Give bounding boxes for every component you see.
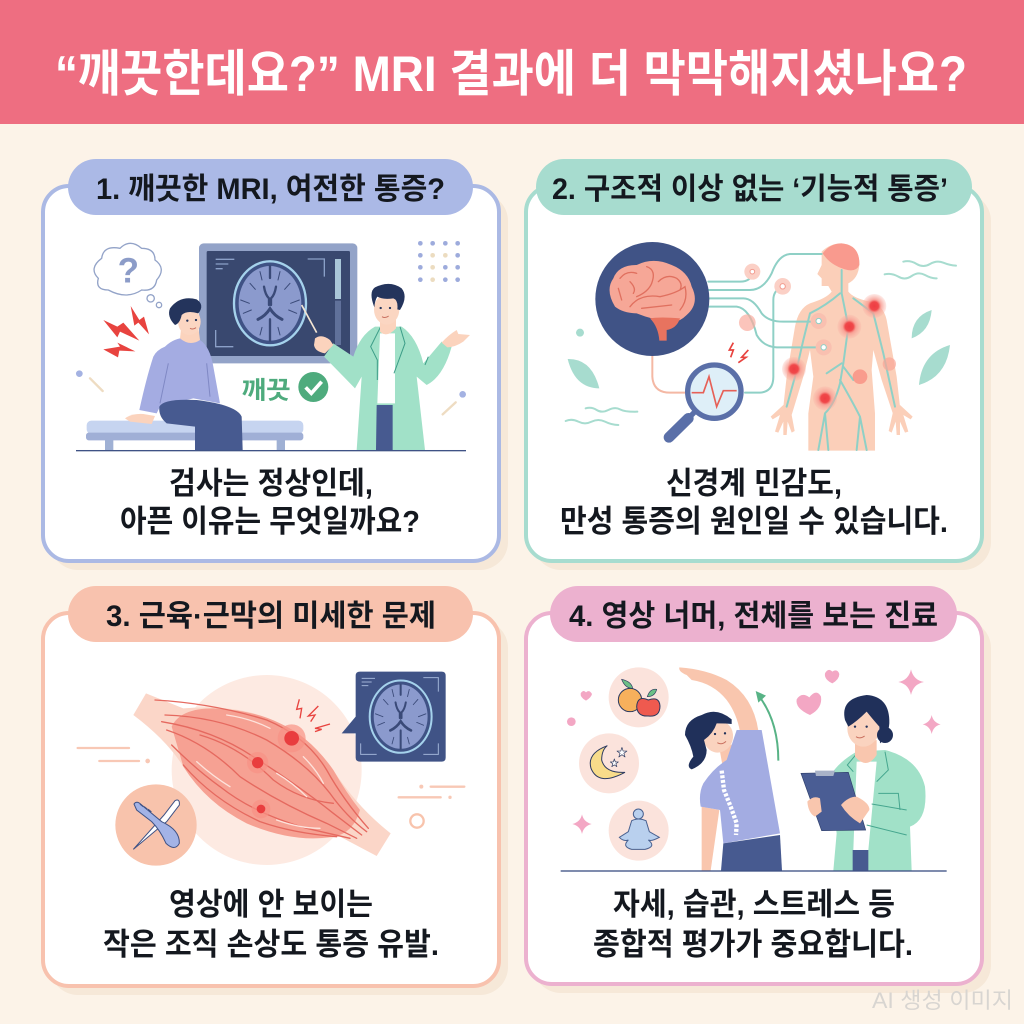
panel 4 caption: 자세, 습관, 스트레스 등 bbox=[613, 887, 895, 922]
pain lightning bolts bbox=[103, 306, 149, 357]
clinician with clipboard bbox=[801, 695, 926, 871]
panel 1 caption bbox=[120, 466, 420, 539]
panel 3 heading: 3. 근육·근막의 미세한 문제 bbox=[106, 600, 436, 633]
motion lines and ring bbox=[78, 748, 464, 828]
brain in body head bbox=[823, 243, 859, 270]
green up arrow bbox=[756, 691, 778, 761]
panel 2 caption: 신경계 민감도, bbox=[666, 466, 842, 501]
panel 2 caption bbox=[560, 466, 948, 539]
panel 4 caption bbox=[593, 887, 913, 962]
floor line bbox=[561, 870, 947, 872]
panel 4 illustration bbox=[561, 667, 947, 872]
human body silhouette bbox=[771, 243, 913, 451]
MRI speech bubble bbox=[342, 672, 446, 762]
magnifier with pulse bbox=[669, 365, 741, 437]
floor line bbox=[76, 450, 466, 451]
lifestyle icon: moon and stars bbox=[579, 733, 639, 793]
brain badge bbox=[595, 242, 709, 356]
small lightning bbox=[729, 343, 748, 363]
AI watermark: AI 생성 이미지 bbox=[872, 988, 1013, 1013]
panel 3 caption: 영상에 안 보이는 bbox=[169, 887, 373, 922]
panel 3 heading bbox=[68, 586, 473, 642]
panel 3: muscle and fascia bbox=[43, 586, 508, 995]
panel 1 illustration bbox=[76, 241, 470, 451]
lifestyle icon: fruit bbox=[609, 667, 669, 727]
panel 1 heading: 1. 깨끗한 MRI, 여전한 통증? bbox=[96, 173, 445, 206]
leaves and waves bbox=[566, 261, 956, 425]
panel 2: functional pain bbox=[526, 159, 991, 570]
panel 3 caption: 작은 조직 손상도 통증 유발. bbox=[103, 927, 439, 962]
panel 1 caption: 검사는 정상인데, bbox=[169, 466, 373, 501]
patient sitting on bench bbox=[86, 298, 303, 451]
panel 2 illustration bbox=[566, 242, 956, 451]
backdrop circle bbox=[172, 675, 362, 865]
panel 1 caption: 아픈 이유는 무엇일까요? bbox=[120, 504, 420, 539]
lifestyle icon: moon and stars: ★ bbox=[610, 758, 619, 768]
MRI monitor bbox=[199, 243, 357, 363]
panel 4: whole-body care bbox=[526, 586, 991, 993]
lifestyle icon: meditation bbox=[609, 801, 669, 861]
brain connector line bbox=[652, 355, 687, 393]
panel 4 heading bbox=[550, 586, 957, 642]
muscle bbox=[133, 693, 391, 856]
pain points bbox=[739, 264, 896, 410]
thought bubble with question mark bbox=[94, 243, 162, 308]
panel 3 caption bbox=[103, 887, 439, 962]
panel 2 heading: 2. 구조적 이상 없는 ‘기능적 통증’ bbox=[552, 173, 948, 206]
lifestyle icon: moon and stars: ★ bbox=[617, 747, 628, 759]
panel 4 caption: 종합적 평가가 중요합니다. bbox=[593, 927, 913, 962]
small lightning bbox=[297, 699, 330, 732]
panel 4 heading: 4. 영상 너머, 전체를 보는 진료 bbox=[569, 600, 938, 633]
panel 2 caption: 만성 통증의 원인일 수 있습니다. bbox=[560, 504, 948, 539]
clean label with check: 깨끗 bbox=[242, 376, 291, 404]
nerve lines bbox=[708, 254, 895, 450]
panel 3 illustration bbox=[78, 672, 464, 866]
panel 1: clean MRI bbox=[43, 159, 508, 570]
hearts and sparkles bbox=[567, 669, 941, 834]
thought bubble with question mark: ? bbox=[118, 252, 139, 291]
clean label with check bbox=[242, 372, 328, 404]
title banner bbox=[0, 0, 1024, 124]
confetti accents bbox=[76, 370, 466, 414]
doctor with pointer bbox=[302, 284, 470, 450]
panel 1 heading bbox=[68, 159, 473, 215]
dot grid bbox=[418, 241, 460, 282]
panel 2 heading bbox=[536, 159, 972, 215]
title banner: “깨끗한데요?” MRI 결과에 더 막막해지셨나요? bbox=[55, 46, 967, 102]
crossed needle and tool badge bbox=[115, 784, 197, 866]
muscle pain spots bbox=[247, 724, 306, 818]
stretching woman bbox=[679, 667, 782, 871]
